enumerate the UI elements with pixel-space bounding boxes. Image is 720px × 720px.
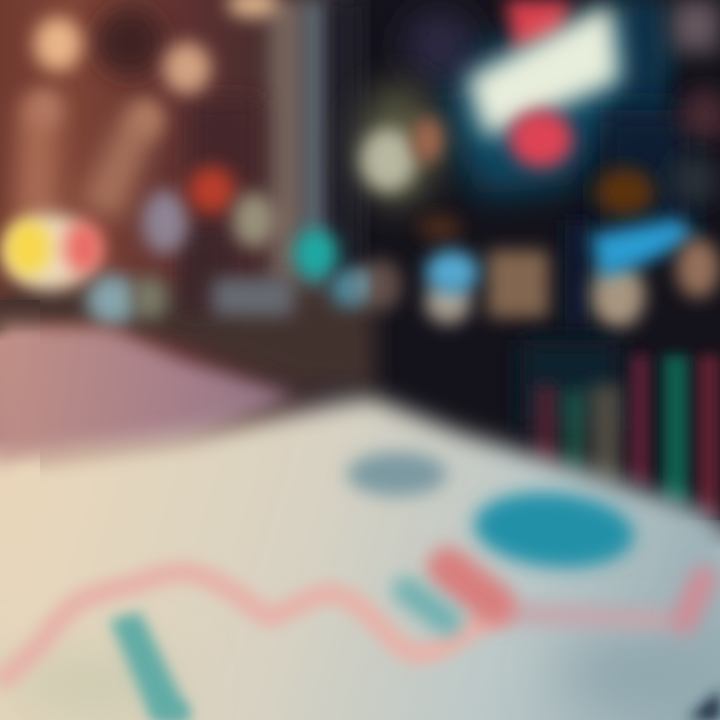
icon: pink blob centre — [448, 568, 494, 604]
icon: round glowing light — [358, 83, 443, 207]
bar chart: dark shelf bars — [520, 340, 720, 520]
chart: faded line on the right — [505, 613, 666, 620]
chart: pink line — [4, 572, 505, 678]
icon: large teal ellipse — [471, 486, 637, 574]
panel: paper sheet — [0, 396, 720, 720]
icon: teal small bar — [406, 590, 448, 622]
panel: right mid-ground screens — [355, 156, 720, 328]
shadow: dark bottom-right corner — [688, 690, 720, 720]
icon: ceiling lights — [26, 0, 279, 138]
panel: edge fill behind floor and paper — [0, 300, 720, 720]
shadow: lower paper tones — [0, 640, 720, 715]
panel: pink floor — [0, 325, 295, 470]
panel: right display with bright sign — [405, 0, 720, 330]
panel: left ceiling and pillar — [0, 0, 375, 390]
panel: left mid-ground lights — [4, 166, 370, 326]
icon: pink marker right — [684, 578, 704, 622]
icon: teal long bar — [110, 612, 192, 720]
icon: small grey-teal ellipse — [347, 452, 447, 496]
